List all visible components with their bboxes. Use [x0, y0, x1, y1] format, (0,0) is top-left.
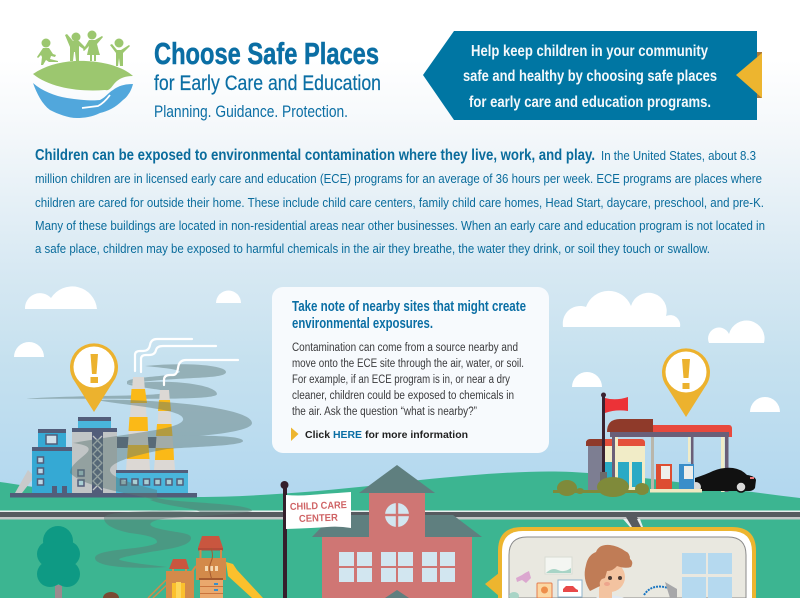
logo	[33, 30, 133, 118]
intro text block: a safe place, children may be exposed to harmful chemicals in the air they breathe, the water they drink, or soil they touch or swallow.	[35, 242, 710, 256]
flag	[602, 394, 605, 482]
round window	[385, 503, 409, 527]
bushes	[553, 477, 649, 497]
classroom window	[682, 553, 732, 598]
right building	[116, 470, 188, 493]
child head at bottom	[103, 592, 119, 598]
wall pictures	[509, 557, 582, 598]
card body: move onto the ECE site through the air, water, or soil.	[292, 358, 524, 370]
small tower	[169, 559, 189, 569]
windows	[339, 552, 455, 582]
logo: blue hand	[33, 83, 133, 118]
info card: Click HERE for more information	[305, 429, 468, 441]
boy	[585, 545, 632, 598]
child care center building	[312, 465, 482, 598]
subtitle: for Early Care and Education	[154, 72, 381, 95]
factory	[10, 377, 197, 498]
white smoke plumes	[135, 339, 238, 385]
gas station	[553, 392, 756, 497]
card body: For example, if an ECE program is in, or near a dry	[292, 374, 510, 386]
big tower	[198, 536, 223, 548]
info card: environmental exposures.	[292, 315, 433, 332]
dotted arc	[644, 587, 668, 595]
child care flag: CENTER	[299, 513, 339, 525]
card body: Contamination can come from a source nearby and	[292, 342, 518, 354]
intro text block: In the United States, about 8.3	[601, 149, 756, 163]
card heading: Take note of nearby sites that might create	[292, 298, 526, 315]
child care flag: CHILD CARE	[290, 500, 347, 513]
clouds	[14, 286, 780, 412]
playground	[148, 536, 263, 598]
banner callout: safe and healthy by choosing safe places	[463, 68, 717, 85]
info card	[272, 287, 549, 453]
contamination smoke trail	[70, 400, 252, 568]
card link	[291, 428, 298, 441]
chimneys	[126, 377, 175, 470]
intro text block	[35, 147, 765, 256]
car	[695, 468, 756, 491]
green hills and lawn	[0, 471, 800, 598]
card body	[292, 342, 524, 418]
left building	[38, 429, 66, 449]
gas station warning pin	[662, 348, 710, 417]
banner callout	[423, 31, 762, 120]
tagline: Planning. Guidance. Protection.	[154, 102, 348, 121]
intro text block: Children can be exposed to environmental contamination where they live, work, and play.	[35, 147, 595, 164]
title: Choose Safe Places	[154, 36, 379, 71]
card body: cleaner, children could be exposed to chemicals in	[292, 390, 514, 402]
canopy	[612, 437, 615, 490]
slide right	[226, 562, 263, 598]
card body: the air. Ask the question “what is nearby?”	[292, 406, 477, 418]
logo: green hill	[33, 61, 133, 90]
logo: children	[37, 30, 130, 66]
smoke trail behind chimneys	[26, 364, 226, 399]
store	[588, 446, 645, 490]
factory warning pin	[70, 343, 118, 412]
banner callout: for early care and education programs.	[469, 94, 711, 111]
banner callout: Help keep children in your community	[471, 43, 708, 60]
road	[0, 510, 800, 527]
classroom callout panel	[485, 527, 756, 598]
fuel pumps	[656, 464, 672, 489]
central building	[78, 417, 111, 429]
tree	[37, 526, 80, 598]
child care flag	[280, 481, 351, 598]
